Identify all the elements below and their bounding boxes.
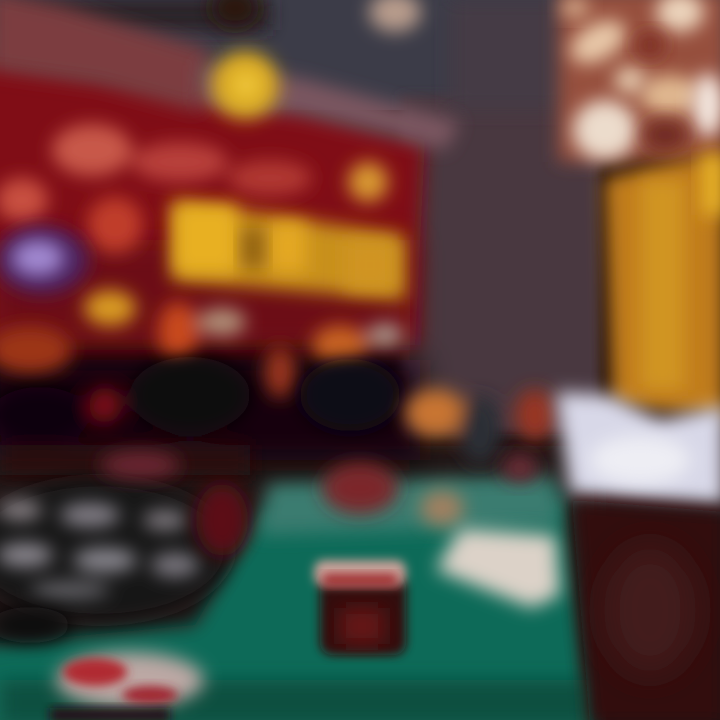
amber drink glass [604, 150, 720, 418]
yellow sign [172, 200, 405, 300]
red back wall of casino [0, 55, 425, 350]
green table [0, 440, 600, 720]
cards on table [50, 652, 204, 720]
yellow star light [211, 51, 279, 119]
orange lights [0, 124, 388, 253]
purple light [0, 226, 88, 294]
red chip stack [314, 560, 406, 655]
dark silhouettes [0, 357, 400, 475]
ceiling beam [0, 0, 460, 150]
poker chips pile [0, 451, 248, 643]
white playing card [436, 528, 560, 608]
white ice [556, 392, 720, 505]
small chips on table [322, 454, 538, 526]
dark brown cup [572, 500, 720, 720]
popcorn bucket top [558, 0, 720, 162]
small lights row [0, 290, 403, 398]
dark silhouette band [0, 360, 420, 460]
background wall [0, 0, 720, 435]
small orange objects [405, 389, 555, 464]
